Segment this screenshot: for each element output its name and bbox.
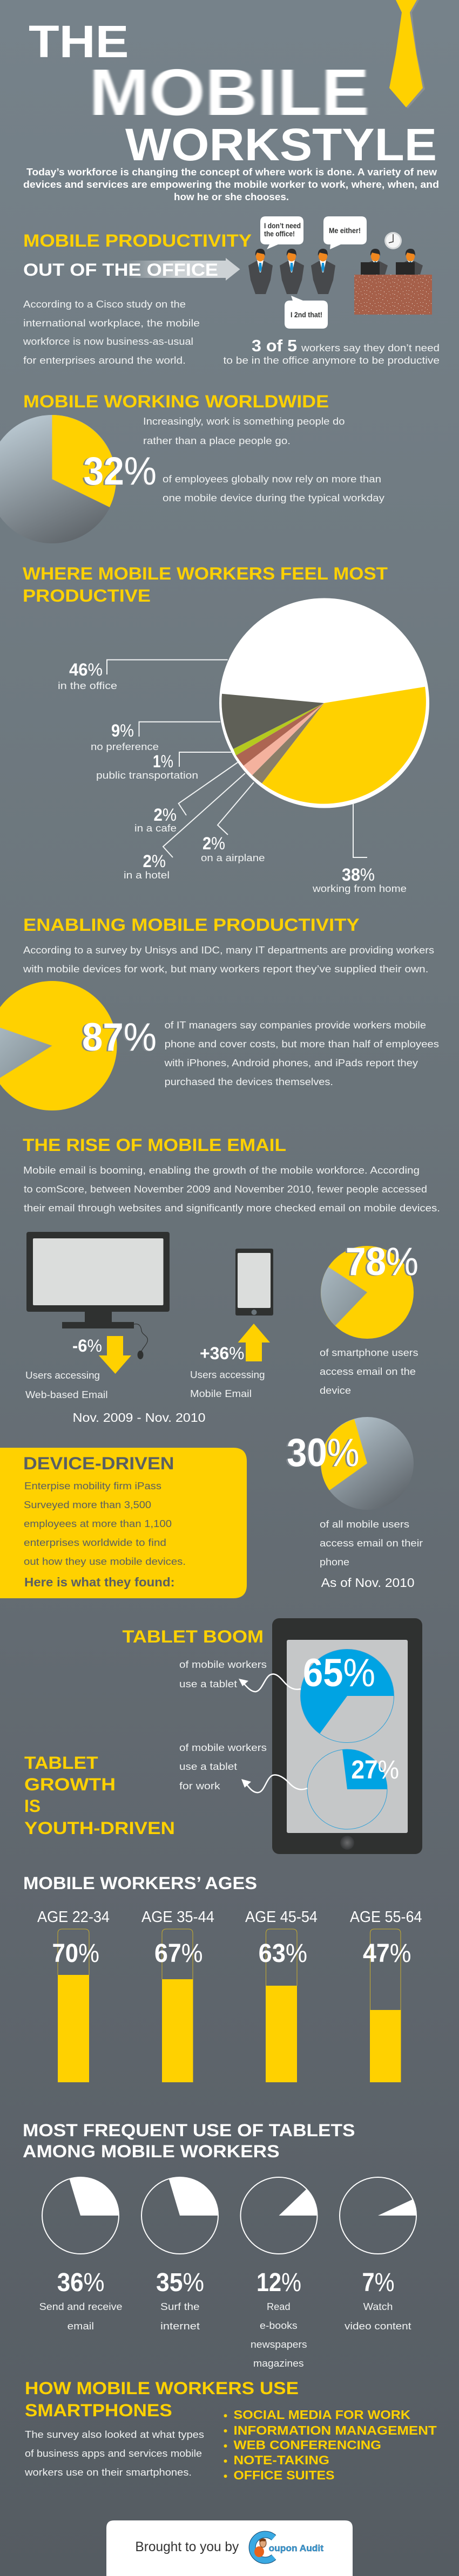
stat description	[163, 473, 385, 503]
bullet list: SOCIAL MEDIA FOR WORK	[233, 2408, 410, 2422]
icon: standing workers	[248, 249, 335, 294]
arrow: web email down	[99, 1336, 131, 1374]
stat description	[164, 1019, 439, 1087]
bullet list: INFORMATION MANAGEMENT	[233, 2423, 437, 2437]
label: web-based email: Web-based Email	[25, 1389, 108, 1400]
pie chart: 27%	[307, 1749, 387, 1829]
panel: enabling mobile productivity	[0, 915, 439, 1110]
body text	[23, 944, 434, 974]
body text: Enterpise mobility firm iPass	[24, 1480, 161, 1491]
body text	[24, 1480, 186, 1567]
bar: age 45-54	[245, 1909, 318, 2082]
label: working from home: working from home	[312, 883, 407, 894]
label: mobile email	[190, 1369, 265, 1399]
stat: 65%: 65%	[303, 1651, 375, 1695]
pie: surf the internet	[141, 2177, 218, 2332]
title: MOBILE	[89, 56, 369, 129]
stat description: phone and cover costs, but more than half of employees	[165, 1038, 439, 1050]
bullet list: OFFICE SUITES	[233, 2468, 335, 2482]
label: in a hotel: 2%	[143, 851, 166, 871]
stat description	[320, 1518, 423, 1568]
label: use a tablet for work: for work	[179, 1780, 220, 1791]
footer: brought to you by	[106, 2520, 353, 2576]
stat: 3 of 5: workers say they don’t need	[301, 342, 440, 353]
body text	[24, 2429, 204, 2478]
panel: device-driven	[0, 1448, 247, 1598]
lead-in: Here is what they found:	[24, 1575, 175, 1589]
icon: smartphone	[235, 1249, 273, 1316]
heading: MOBILE WORKERS’ AGES	[23, 1873, 257, 1893]
pie: surf the internet: Surf the	[160, 2301, 200, 2312]
text: increasingly: Increasingly, work is something people do	[143, 415, 345, 427]
pie: watch video content: Watch	[363, 2301, 393, 2312]
bar: age 55-64	[350, 1909, 422, 2082]
pie: read e-books, newspapers, magazines: Read	[267, 2301, 291, 2312]
stat: 3 of 5: 3 of 5	[252, 336, 297, 355]
label: on an airplane: on a airplane	[201, 852, 265, 863]
bar: age 55-64: AGE 55-64	[350, 1909, 422, 1926]
heading: SMARTPHONES	[25, 2401, 172, 2420]
panel: most frequent use of tablets	[23, 2121, 416, 2369]
body text: Surveyed more than 3,500	[24, 1499, 151, 1510]
label: in a cafe: 2%	[153, 805, 177, 824]
yellow callout background	[0, 1448, 247, 1598]
panel: tablet	[24, 1618, 422, 1854]
body text: to comScore, between November 2009 and November 2010, fewer people accessed	[24, 1183, 427, 1195]
label: web-based email	[25, 1369, 108, 1400]
label: public transportation	[96, 752, 233, 781]
body text: of business apps and services mobile	[25, 2448, 202, 2459]
pie chart: 30%	[321, 1417, 414, 1510]
heading: DEVICE-DRIVEN	[23, 1454, 174, 1473]
panel: the rise of mobile email	[23, 1135, 440, 1425]
label: on an airplane	[201, 782, 265, 863]
label: use a tablet	[179, 1659, 267, 1689]
pie: read e-books, newspapers, magazines: newspapers	[251, 2339, 307, 2350]
arrow: wavy to 27%	[241, 1775, 307, 1793]
heading	[23, 564, 388, 605]
pie: watch video content: 7%	[362, 2268, 394, 2297]
pie: send and receive email: Send and receive	[39, 2301, 122, 2312]
heading: tablet growth: IS	[24, 1796, 40, 1816]
stat: 3 of 5	[224, 336, 440, 366]
pie: read e-books, newspapers, magazines: 12%	[256, 2268, 301, 2297]
label: in the office	[58, 660, 228, 691]
arrow: wavy to 65%	[239, 1674, 301, 1692]
label: no preference: 9%	[111, 721, 134, 740]
stat description: one mobile device during the typical workday	[163, 492, 385, 503]
panel: mobile workers' ages	[23, 1873, 422, 2082]
text: increasingly: rather than a place people go.	[143, 435, 291, 446]
pie: send and receive email	[39, 2177, 122, 2332]
heading: PRODUCTIVE	[23, 586, 151, 605]
pie: send and receive email: email	[68, 2320, 94, 2332]
speech bubble 1: the office!	[264, 229, 295, 238]
intro text	[23, 166, 439, 202]
label: use a tablet for work: use a tablet	[179, 1761, 237, 1772]
stat description: access email on their	[320, 1537, 423, 1549]
icon: seated workers at desk	[354, 249, 432, 315]
label: web-based email: Users accessing	[25, 1369, 100, 1381]
label: in a hotel: in a hotel	[124, 869, 170, 881]
panel: where mobile workers feel most productive	[23, 564, 429, 894]
heading: MOBILE PRODUCTIVITY	[23, 231, 252, 250]
icon: clock	[384, 232, 402, 249]
heading: WHERE MOBILE WORKERS FEEL MOST	[23, 564, 388, 583]
title: WORKSTYLE	[125, 119, 437, 170]
stat: +36%: +36%	[200, 1344, 244, 1363]
body text	[23, 298, 200, 366]
stat: 30%: 30%	[287, 1431, 360, 1475]
label: working from home: 38%	[342, 865, 375, 884]
label: in a hotel	[124, 773, 245, 881]
icon: tablet device	[272, 1618, 422, 1854]
heading: tablet growth: GROWTH	[24, 1775, 116, 1794]
body text: for enterprises around the world.	[23, 355, 186, 366]
date range: Nov. 2009 - Nov. 2010	[72, 1410, 205, 1425]
label: in the office: 46%	[69, 660, 103, 679]
label: in the office: in the office	[58, 680, 117, 691]
bar: age 22-34: 70%	[52, 1939, 99, 1968]
text: increasingly	[143, 415, 345, 446]
stat description: of all mobile users	[320, 1518, 409, 1530]
heading: AMONG MOBILE WORKERS	[23, 2142, 280, 2161]
body text: According to a Cisco study on the	[23, 298, 186, 310]
arrow: mobile email up	[238, 1324, 270, 1361]
body text: employees at more than 1,100	[24, 1518, 172, 1529]
speech bubble 2	[323, 216, 367, 249]
intro text: devices and services are empowering the mobile worker to work, where, when, and	[23, 179, 439, 190]
pie: watch video content	[340, 2177, 416, 2332]
stat: 78%: 78%	[346, 1240, 418, 1284]
bar: age 35-44: 67%	[154, 1939, 203, 1968]
speech bubble 2: Me either!	[329, 226, 361, 235]
body text: out how they use mobile devices.	[24, 1556, 186, 1567]
body text	[23, 1164, 440, 1214]
intro text: how he or she chooses.	[174, 191, 289, 202]
icon: desktop monitor	[26, 1232, 170, 1359]
bar: age 55-64: 47%	[363, 1939, 411, 1968]
label: working from home	[312, 804, 407, 894]
speech bubble 3	[285, 296, 328, 329]
label: in a cafe: in a cafe	[134, 822, 177, 834]
white footer card	[106, 2520, 353, 2576]
body text: enterprises worldwide to find	[24, 1537, 166, 1548]
pie: surf the internet: 35%	[156, 2268, 204, 2297]
bar: age 35-44	[141, 1909, 214, 2082]
heading: MOBILE WORKING WORLDWIDE	[23, 392, 329, 411]
label: no preference: no preference	[91, 741, 159, 752]
stat description: of IT managers say companies provide workers mobile	[165, 1019, 426, 1031]
title	[29, 16, 437, 170]
body text: The survey also looked at what types	[25, 2429, 204, 2440]
heading	[23, 2121, 355, 2161]
heading: HOW MOBILE WORKERS USE	[25, 2379, 299, 2398]
bar: age 35-44: AGE 35-44	[141, 1909, 214, 1926]
panel: mobile working worldwide	[0, 392, 385, 543]
body text: workers use on their smartphones.	[24, 2466, 192, 2478]
bar: age 22-34: AGE 22-34	[37, 1909, 110, 1926]
label: on an airplane: 2%	[202, 834, 225, 853]
pie chart: 32%	[0, 415, 117, 543]
bar: age 22-34	[37, 1909, 110, 2082]
speech bubble 3: I 2nd that!	[291, 310, 322, 319]
pie chart: 65%	[300, 1649, 394, 1743]
stat: 87%: 87%	[82, 1016, 157, 1059]
pie: send and receive email: 36%	[57, 2268, 105, 2297]
logo: coupon audit	[252, 2534, 323, 2560]
pie chart: 78%	[321, 1246, 414, 1339]
body text: workforce is now business-as-usual	[23, 336, 193, 347]
heading	[25, 2379, 299, 2420]
bar: age 45-54: AGE 45-54	[245, 1909, 318, 1926]
label: mobile email: Users accessing	[190, 1369, 265, 1380]
stat: 32%: 32%	[83, 449, 157, 493]
arrow: out of the office	[123, 258, 240, 281]
intro text: Today’s workforce is changing the concept of where work is done. A variety of new	[26, 166, 437, 178]
stat: 3 of 5: to be in the office anymore to be productive	[224, 355, 440, 366]
stat description: of employees globally now rely on more than	[163, 473, 381, 485]
subheading: OUT OF THE OFFICE	[23, 260, 218, 280]
pie: read e-books, newspapers, magazines	[241, 2177, 318, 2369]
stat description: access email on the	[320, 1366, 416, 1377]
bullet list: NOTE-TAKING	[233, 2453, 329, 2467]
label: public transportation: public transportation	[96, 769, 198, 781]
logo: coupon audit: oupon Audit	[269, 2543, 323, 2553]
heading: ENABLING MOBILE PRODUCTIVITY	[23, 915, 360, 935]
stat description	[320, 1347, 418, 1396]
panel: 30% stat	[287, 1417, 423, 1590]
pie: watch video content: video content	[345, 2320, 411, 2332]
panel: how mobile workers use smartphones	[24, 2379, 437, 2482]
label: public transportation: 1%	[153, 752, 173, 771]
stat description: of smartphone users	[320, 1347, 418, 1358]
heading: tablet boom: TABLET BOOM	[122, 1627, 264, 1646]
heading: THE RISE OF MOBILE EMAIL	[23, 1135, 286, 1155]
label: no preference	[91, 721, 220, 752]
pie: read e-books, newspapers, magazines: magazines	[253, 2357, 304, 2369]
label: in a cafe	[134, 762, 238, 834]
stat description: device	[320, 1385, 351, 1396]
bullet list	[224, 2408, 437, 2482]
label: use a tablet: of mobile workers	[179, 1659, 267, 1670]
body text: international workplace, the mobile	[23, 317, 200, 329]
stat: -6%: -6%	[72, 1336, 102, 1355]
body text: with mobile devices for work, but many workers report they’ve supplied their own.	[23, 963, 429, 974]
pie: surf the internet: internet	[160, 2320, 200, 2332]
bar: age 45-54: 63%	[259, 1939, 307, 1968]
stat description: with iPhones, Android phones, and iPads report they	[164, 1057, 418, 1068]
speech bubble 1	[260, 216, 303, 249]
heading: MOST FREQUENT USE OF TABLETS	[23, 2121, 355, 2140]
date: As of Nov. 2010	[321, 1576, 415, 1590]
label: use a tablet: use a tablet	[179, 1678, 237, 1689]
heading: tablet growth: TABLET	[24, 1753, 98, 1773]
heading: tablet growth: YOUTH-DRIVEN	[24, 1818, 175, 1838]
stat description: purchased the devices themselves.	[165, 1076, 333, 1087]
panel: mobile productivity	[23, 216, 440, 366]
label: use a tablet for work: of mobile workers	[179, 1742, 267, 1753]
body text: their email through websites and significantly more checked email on mobile devices.	[24, 1202, 440, 1214]
label: use a tablet for work	[179, 1742, 267, 1791]
title: THE	[29, 16, 129, 67]
body text: Mobile email is booming, enabling the growth of the mobile workforce. According	[23, 1164, 420, 1176]
heading: tablet growth	[24, 1753, 175, 1838]
speech bubble 1: I don’t need	[264, 221, 301, 230]
icon: necktie	[389, 0, 425, 108]
body text: According to a survey by Unisys and IDC, many IT departments are providing workers	[23, 944, 434, 956]
pie: read e-books, newspapers, magazines: e-books	[260, 2320, 298, 2331]
pie chart: productive locations	[219, 598, 429, 808]
bullet list: WEB CONFERENCING	[233, 2438, 381, 2452]
credit text: Brought to you by	[135, 2539, 239, 2554]
stat description: phone	[320, 1556, 349, 1568]
label: mobile email: Mobile Email	[190, 1388, 252, 1399]
pie chart: 87%	[0, 981, 117, 1110]
stat: 27%: 27%	[351, 1756, 399, 1784]
